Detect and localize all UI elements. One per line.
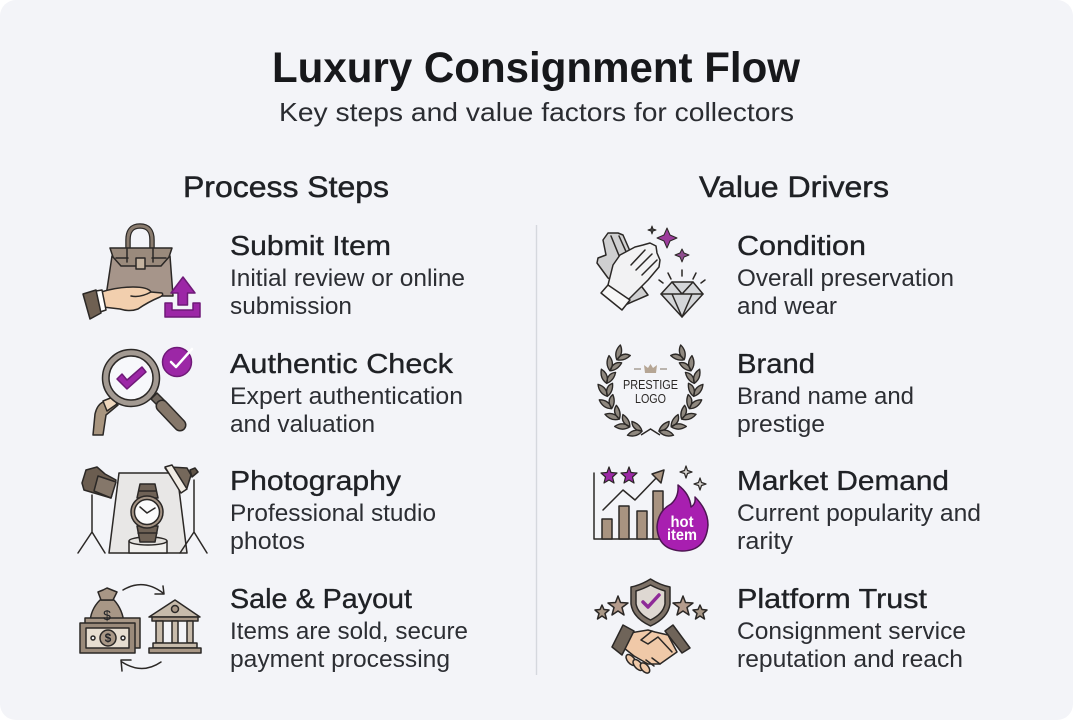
step: submit item xyxy=(83,226,465,320)
step: photography xyxy=(78,465,436,555)
step: sale and payout xyxy=(80,583,468,673)
step title: Sale & Payout xyxy=(230,583,412,614)
step title: Platform Trust xyxy=(737,583,927,614)
icon: prestige logo laurel wreath xyxy=(598,345,703,438)
title: Luxury Consignment Flow xyxy=(272,44,801,92)
icon: shield, stars and handshake xyxy=(595,579,707,675)
step description: Initial review or online xyxy=(230,265,465,292)
step title: Market Demand xyxy=(737,465,949,496)
step description line 2: submission xyxy=(230,293,352,320)
heading: value drivers: Value Drivers xyxy=(699,171,889,204)
driver: brand xyxy=(598,345,914,438)
step title: Submit Item xyxy=(230,230,391,261)
step title: Brand xyxy=(737,348,815,379)
step title: Authentic Check xyxy=(230,348,454,379)
step description line 2: reputation and reach xyxy=(737,646,963,673)
icon: magnifying glass with check xyxy=(93,348,192,435)
subtitle: Key steps and value factors for collectors xyxy=(279,97,794,127)
driver: platform trust xyxy=(595,579,966,675)
step description: Current popularity and xyxy=(737,500,981,527)
icon: prestige logo laurel wreath: LOGO xyxy=(635,392,666,406)
driver: condition xyxy=(597,226,954,320)
step description: Items are sold, secure xyxy=(230,618,468,645)
icon: rising chart with hot item flame xyxy=(594,466,708,551)
driver: market demand xyxy=(594,465,981,555)
step title: Condition xyxy=(737,230,866,261)
icon: prestige logo laurel wreath: PRESTIGE xyxy=(623,378,678,392)
step description line 2: rarity xyxy=(737,528,793,555)
step description: Expert authentication xyxy=(230,383,463,410)
step: authentic check xyxy=(93,348,463,438)
panel: value drivers xyxy=(594,171,981,675)
icon: white gloves, sparkles and diamond xyxy=(597,226,705,317)
step description: Professional studio xyxy=(230,500,436,527)
icon: handbag on hand with upload arrow xyxy=(83,226,200,319)
step title: Photography xyxy=(230,465,401,496)
step description line 2: photos xyxy=(230,528,305,555)
heading: process steps: Process Steps xyxy=(183,171,389,204)
step description: Brand name and xyxy=(737,383,914,410)
icon: rising chart with hot item flame: hot xyxy=(670,514,694,531)
step description line 2: prestige xyxy=(737,411,825,438)
icon: money bag, cash and bank: $ xyxy=(103,607,111,623)
icon: money bag, cash and bank: $ xyxy=(105,631,112,645)
step description: Overall preservation xyxy=(737,265,954,292)
icon: studio with watch, camera and lamp xyxy=(78,465,207,553)
step description: Consignment service xyxy=(737,618,966,645)
step description line 2: payment processing xyxy=(230,646,450,673)
step description line 2: and valuation xyxy=(230,411,375,438)
panel: process steps xyxy=(78,171,468,673)
icon: money bag, cash and bank xyxy=(80,585,201,671)
icon: rising chart with hot item flame: item xyxy=(667,527,697,544)
step description line 2: and wear xyxy=(737,293,837,320)
